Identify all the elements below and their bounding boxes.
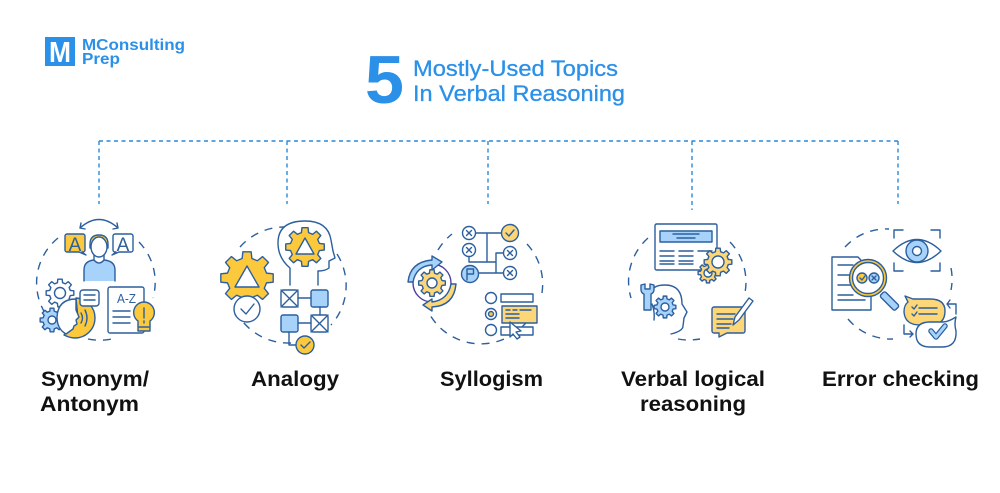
title: 5 <box>365 42 404 118</box>
title <box>365 42 625 118</box>
label: Error checking: Error checking <box>822 368 979 391</box>
title: In Verbal Reasoning <box>413 81 625 106</box>
label: Synonym/Antonym: Antonym <box>40 393 139 416</box>
icon: synonym / antonym: A-Z <box>117 292 136 306</box>
icon: synonym / antonym <box>37 220 155 340</box>
title: Mostly-Used Topics <box>413 56 618 81</box>
icon: analogy <box>221 221 346 354</box>
dashed connector tree <box>99 141 898 210</box>
icon: synonym / antonym: A <box>69 235 82 256</box>
icon: error checking <box>832 229 956 347</box>
icon: syllogism <box>408 224 543 344</box>
logo: MConsulting Prep: MConsulting <box>82 37 185 54</box>
label: Synonym/Antonym <box>40 368 149 416</box>
label: Verbal logical reasoning <box>621 368 765 416</box>
logo: MConsulting Prep <box>45 37 185 69</box>
icon: synonym / antonym: A <box>117 235 130 256</box>
label: Verbal logical reasoning: reasoning <box>640 393 746 416</box>
label: Syllogism: Syllogism <box>440 368 543 391</box>
logo: MConsulting Prep: M <box>49 37 71 69</box>
label: Verbal logical reasoning: Verbal logical <box>621 368 765 391</box>
logo: MConsulting Prep: Prep <box>82 51 120 68</box>
label: Analogy: Analogy <box>251 368 339 391</box>
icon: verbal logical reasoning <box>629 224 753 340</box>
label: Synonym/Antonym: Synonym/ <box>41 368 149 391</box>
